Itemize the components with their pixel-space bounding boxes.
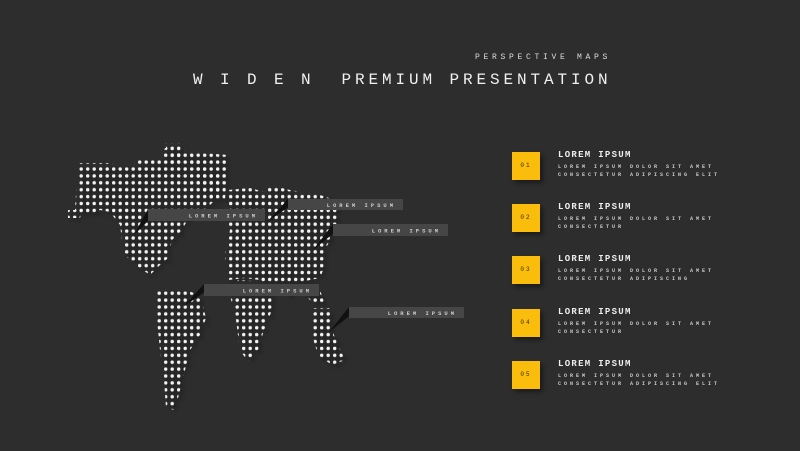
callout 5 xyxy=(329,307,464,332)
callout 4: LOREM IPSUM xyxy=(243,288,312,294)
callout 1: LOREM IPSUM xyxy=(189,212,258,220)
callout 2: LOREM IPSUM xyxy=(327,202,396,209)
item 02: 02 xyxy=(520,214,532,221)
callout 3: LOREM IPSUM xyxy=(372,228,441,234)
item 04: CONSECTETUR xyxy=(558,329,624,335)
item 03: CONSECTETUR ADIPISCING xyxy=(558,276,690,282)
item 03 xyxy=(512,254,714,288)
item 02: LOREM IPSUM DOLOR SIT AMET xyxy=(558,216,714,222)
item 01: LOREM IPSUM DOLOR SIT AMET xyxy=(558,164,714,170)
item 02: LOREM IPSUM xyxy=(558,202,632,212)
item 03: LOREM IPSUM DOLOR SIT AMET xyxy=(558,268,714,274)
item 03: 03 xyxy=(520,266,532,273)
item 05 xyxy=(512,359,720,392)
item 01: LOREM IPSUM xyxy=(558,150,632,160)
item 04: LOREM IPSUM DOLOR SIT AMET xyxy=(558,321,714,327)
title: W I D E N PREMIUM PRESENTATION xyxy=(193,71,612,89)
item 04: LOREM IPSUM xyxy=(558,307,632,317)
callout 1 xyxy=(134,209,265,235)
item 01: CONSECTETUR ADIPISCING ELIT xyxy=(558,172,720,178)
item 01 xyxy=(512,150,720,184)
item 04 xyxy=(512,307,714,340)
callout 4 xyxy=(183,284,319,307)
callout 2 xyxy=(267,199,403,222)
item 04: 04 xyxy=(520,319,532,326)
item 01: 01 xyxy=(520,162,532,169)
item 05: CONSECTETUR ADIPISCING ELIT xyxy=(558,381,720,387)
callout 3 xyxy=(313,224,448,250)
item 03: LOREM IPSUM xyxy=(558,254,632,264)
item 02 xyxy=(512,202,714,236)
item 02: CONSECTETUR xyxy=(558,224,624,230)
subtitle: PERSPECTIVE MAPS xyxy=(475,53,611,62)
item 05: LOREM IPSUM xyxy=(558,359,632,369)
item 05: 05 xyxy=(520,371,532,378)
callout 5: LOREM IPSUM xyxy=(388,310,457,317)
item 05: LOREM IPSUM DOLOR SIT AMET xyxy=(558,373,714,379)
